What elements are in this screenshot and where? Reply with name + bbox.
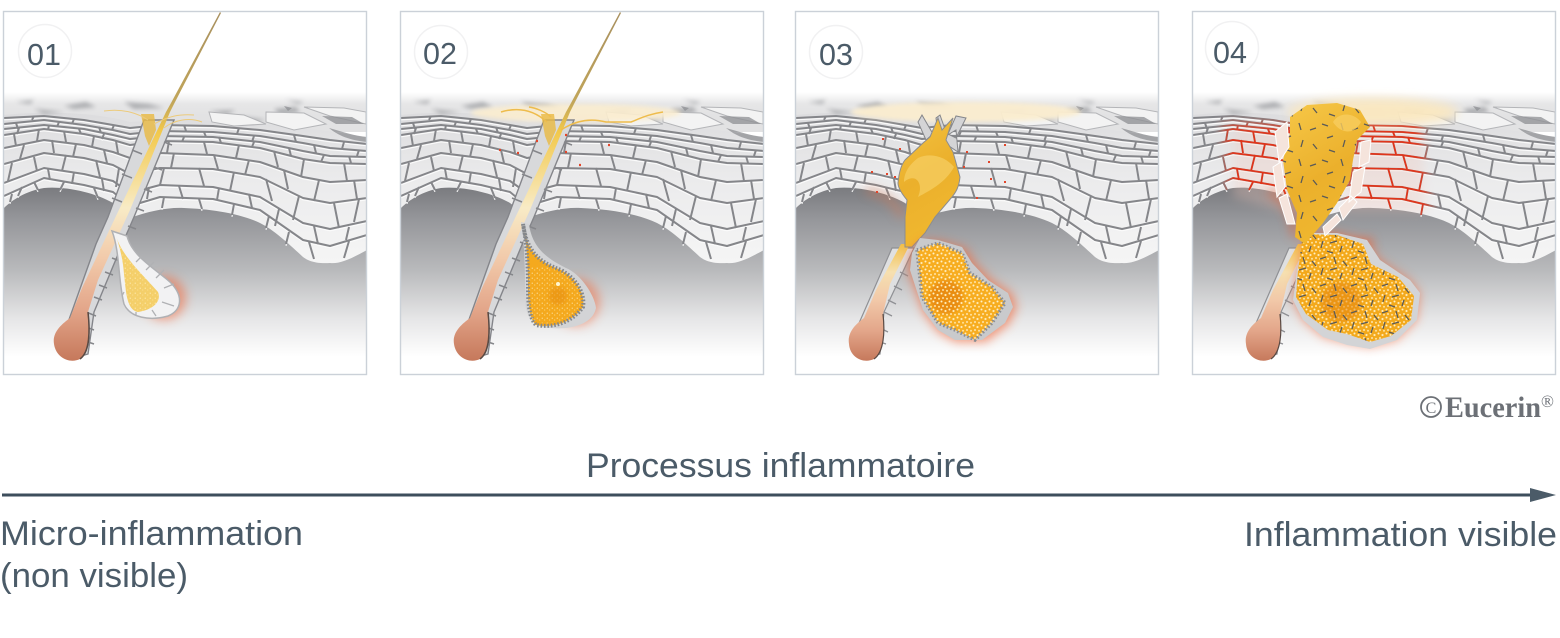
- decorative inflammation dots: [871, 139, 1006, 198]
- illustration: sebaceous gland: [908, 238, 1017, 342]
- brand mark: Eucerin: C: [1426, 400, 1436, 417]
- decorative red glow under epidermis: [1269, 192, 1373, 246]
- label: non visible: (non visible): [0, 557, 188, 595]
- panel 04: visible inflammation: [1192, 12, 1556, 375]
- number badge 01: [18, 24, 72, 78]
- decorative red glow under epidermis: [866, 190, 902, 217]
- decorative pink inflamed cells: [1233, 127, 1425, 217]
- illustration: hair follicle: [1246, 244, 1302, 361]
- number badge 02: 02: [423, 37, 457, 71]
- arrow: timeline: [2, 488, 1556, 502]
- illustration: hair follicle: [454, 12, 621, 361]
- illustration: sebaceous gland: [521, 222, 600, 328]
- decorative yellow sebum tendrils: [501, 107, 663, 130]
- label: visible inflammation: Inflammation visible: [1244, 516, 1557, 554]
- decorative yellow sebum tendrils: [104, 110, 202, 128]
- heading: inflammatory process: Processus inflammatoire: [586, 447, 975, 485]
- illustration: sebaceous gland: [112, 231, 186, 320]
- number badge 04: 04: [1213, 36, 1247, 70]
- illustration: sebaceous gland: [1293, 233, 1420, 349]
- illustration: hair follicle: [54, 12, 221, 361]
- illustration: hair follicle: [849, 244, 914, 361]
- illustration: yellowed skin surface: [471, 104, 681, 122]
- panel 03: duct bulge: [796, 12, 1159, 375]
- panel 01: early micro-inflammation: [4, 12, 367, 375]
- illustration: comedone bulge: [898, 115, 966, 247]
- label: micro-inflammation: Micro-inflammation: [0, 515, 303, 553]
- number badge 04: [1206, 22, 1258, 74]
- brand mark: Eucerin: ®: [1541, 392, 1554, 411]
- illustration: yellowed skin surface: [851, 102, 1081, 122]
- number badge 02: [414, 26, 468, 78]
- number badge 01: 01: [27, 38, 61, 72]
- panel 02: sebum growing: [400, 12, 764, 375]
- brand mark: Eucerin: Eucerin: [1445, 391, 1541, 424]
- illustration: yellowed skin surface: [1288, 98, 1458, 126]
- number badge 03: [810, 26, 862, 78]
- decorative inflammation dots: [499, 135, 610, 165]
- illustration: ruptured comedone: [1273, 103, 1371, 244]
- illustration: red inflamed cell borders: [1217, 117, 1437, 216]
- number badge 03: 03: [819, 38, 853, 72]
